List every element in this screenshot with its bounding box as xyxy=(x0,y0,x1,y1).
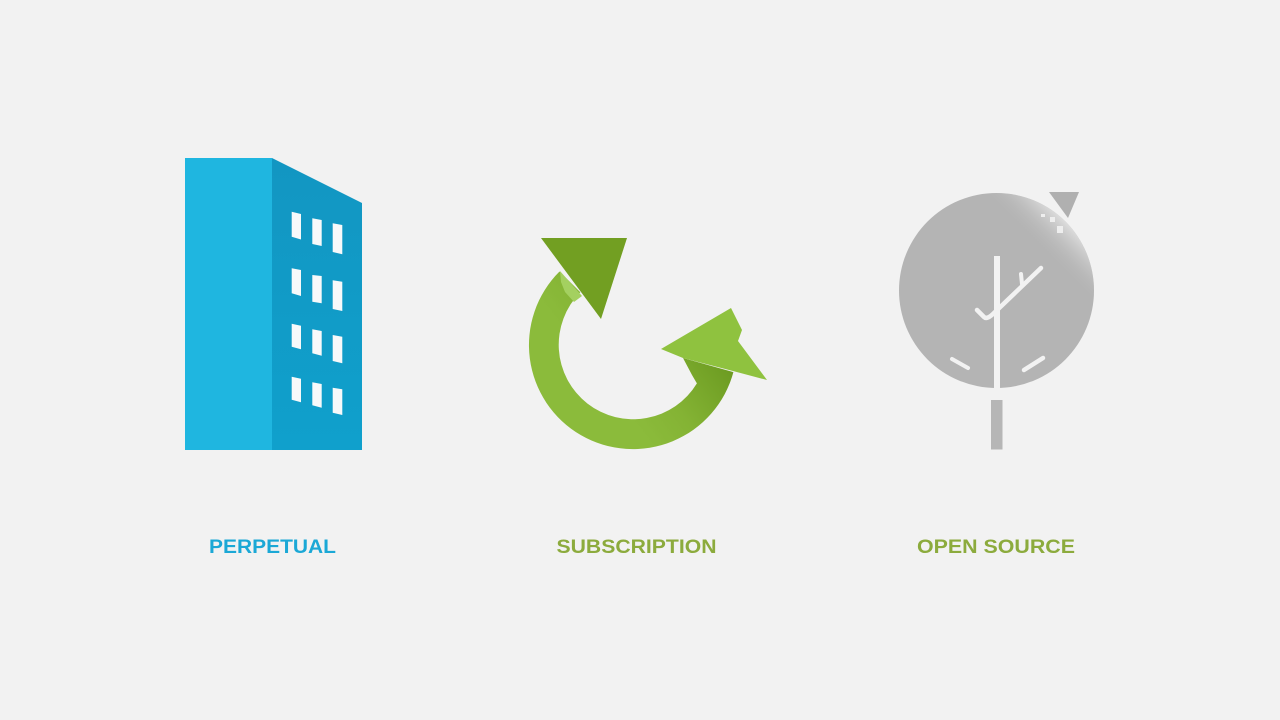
building side face xyxy=(272,158,362,450)
arrowhead: top xyxy=(541,238,627,319)
tree stem base xyxy=(991,400,1002,450)
tree branches xyxy=(952,268,1043,370)
icon: tree xyxy=(899,192,1094,450)
crown highlight xyxy=(899,193,1094,388)
crown highlight specks xyxy=(1041,192,1085,233)
tree trunk xyxy=(994,256,1000,389)
arrowhead: right xyxy=(661,308,767,380)
icon: building xyxy=(185,158,362,450)
icon: circular arrow xyxy=(529,238,767,449)
tree crown xyxy=(899,193,1094,388)
arrow ring xyxy=(529,272,733,449)
building front face xyxy=(185,158,272,450)
building windows xyxy=(292,212,342,415)
label: subscription: SUBSCRIPTION xyxy=(556,537,716,558)
ring highlight xyxy=(560,271,582,302)
tree top triangle xyxy=(1049,192,1079,218)
label: open source: OPEN SOURCE xyxy=(917,537,1075,558)
label: perpetual: PERPETUAL xyxy=(209,537,336,558)
